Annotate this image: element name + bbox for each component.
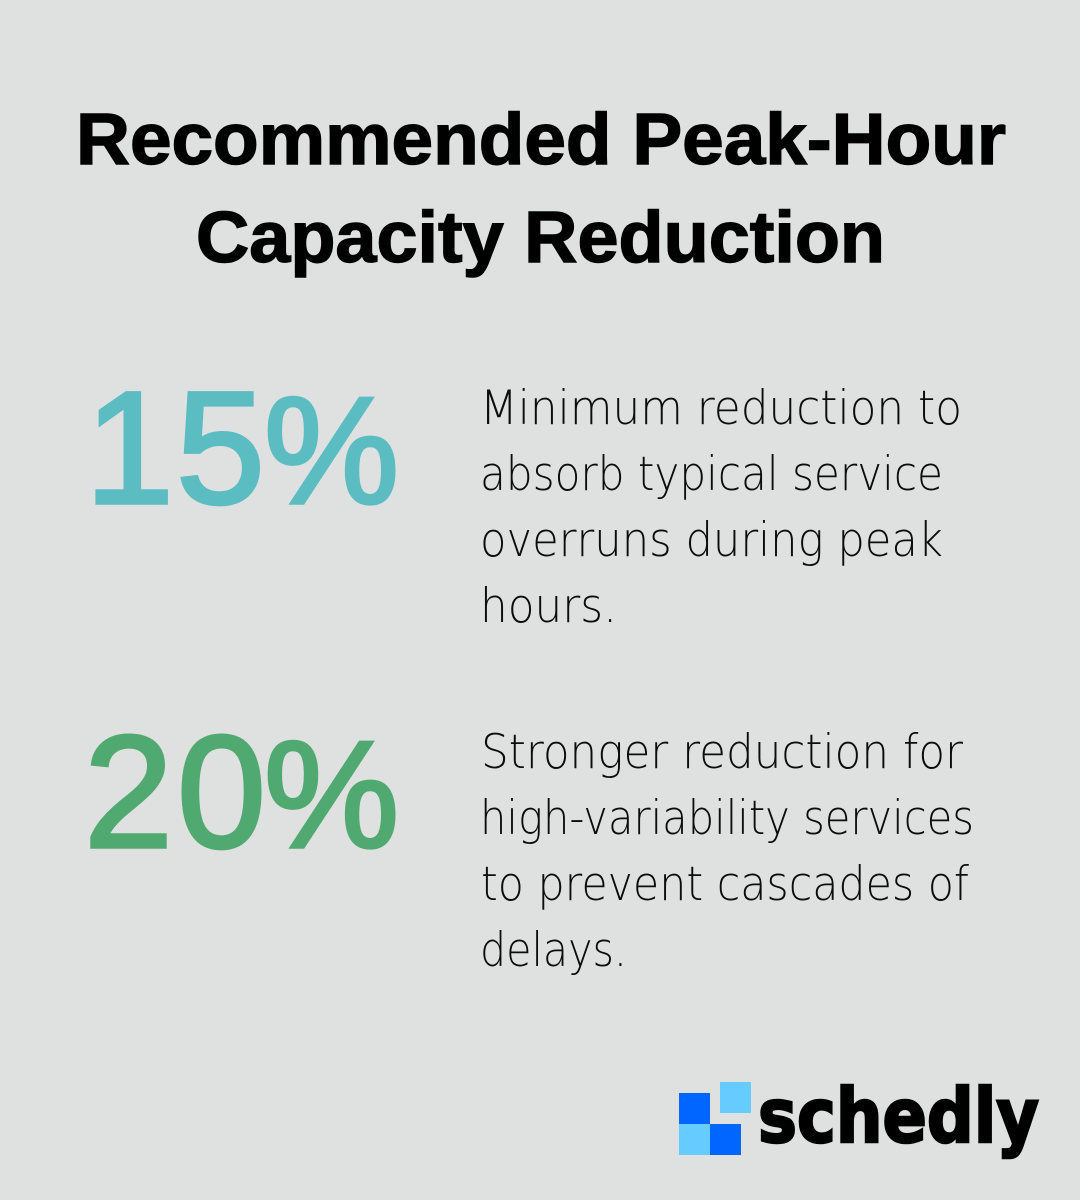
description: 20%: high-variability services xyxy=(480,791,974,846)
title xyxy=(76,100,1006,278)
stat: 15%: 1 xyxy=(85,358,174,537)
stat: 20%: % xyxy=(264,710,399,880)
title: Capacity Reduction xyxy=(196,198,885,278)
stat: 15%: % xyxy=(264,366,399,536)
stat: 20%: 0 xyxy=(177,702,266,881)
icon: logo squares xyxy=(679,1082,751,1155)
description: 15%: Minimum reduction to xyxy=(480,381,962,436)
logo: schedly xyxy=(679,1072,1039,1160)
logo wordmark: schedly xyxy=(758,1072,1039,1160)
description: 20%: Stronger reduction for xyxy=(481,725,964,780)
description: 15%: hours. xyxy=(480,579,617,634)
description: 20% xyxy=(480,725,974,978)
description: 15%: absorb typical service xyxy=(480,447,943,502)
stat: 20%: 2 xyxy=(84,702,173,881)
description: 15%: overruns during peak xyxy=(480,513,943,568)
description: 20%: delays. xyxy=(480,923,627,978)
title: Recommended Peak-Hour xyxy=(76,100,1006,180)
stat: 15%: 5 xyxy=(176,358,265,537)
description: 15% xyxy=(480,381,962,634)
description: 20%: to prevent cascades of xyxy=(481,857,969,912)
